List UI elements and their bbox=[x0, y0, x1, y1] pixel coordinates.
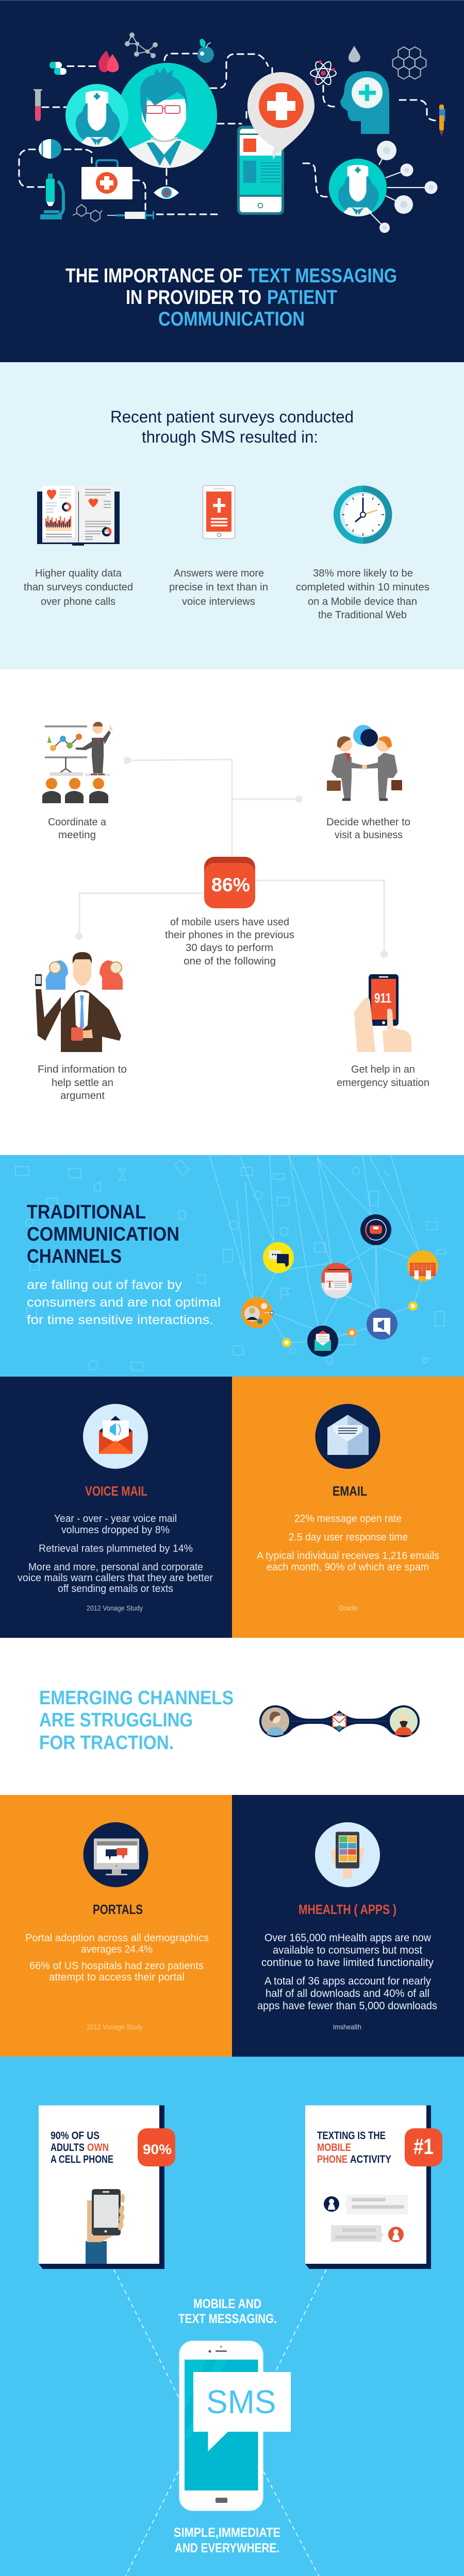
text: portal stats: averages 24.4% bbox=[81, 1944, 153, 1955]
caption: visit: visit a business bbox=[335, 829, 403, 841]
text: mobile and text messaging: TEXT MESSAGING. bbox=[178, 2312, 277, 2326]
icon: phone with cross bbox=[203, 485, 235, 539]
icon: head with cross bbox=[340, 71, 389, 134]
caption: visit bbox=[326, 817, 410, 841]
text: voice mail stats: voice mails warn callers that they are better bbox=[18, 1572, 213, 1584]
panel: mhealth bbox=[232, 1795, 464, 2057]
icon: monitor bbox=[84, 1822, 148, 1887]
callout: SMS bubble bbox=[193, 2372, 291, 2451]
icon: doctor bbox=[117, 63, 217, 170]
icon: keyboard node bbox=[407, 1250, 438, 1281]
icon: email envelope bbox=[316, 1404, 380, 1469]
text: own a cell phone: A CELL PHONE bbox=[51, 2154, 113, 2165]
dashed lines to cards bbox=[114, 2269, 326, 2576]
heading: emerging: FOR TRACTION. bbox=[39, 1732, 174, 1754]
icon: people node bbox=[241, 1297, 273, 1328]
caption: argument: help settle an bbox=[52, 1077, 113, 1089]
heading: survey: through SMS resulted in: bbox=[142, 428, 318, 446]
heading: survey: Recent patient surveys conducted bbox=[110, 408, 354, 426]
title: COMMUNICATION bbox=[158, 308, 305, 330]
caption: emergency bbox=[337, 1064, 429, 1089]
text: falling out of favor: are falling out of favor by bbox=[27, 1278, 183, 1292]
icon: chat bubbles bbox=[324, 2195, 408, 2242]
text: texting activity: ACTIVITY bbox=[350, 2154, 391, 2165]
title: TEXT MESSAGING bbox=[248, 265, 397, 287]
caption: emergency: emergency situation bbox=[337, 1077, 429, 1089]
heading: traditional: COMMUNICATION bbox=[27, 1224, 179, 1245]
icon: article node: T bbox=[326, 1279, 334, 1290]
text: mobile users bbox=[165, 917, 294, 967]
text: email stats: 22% message open rate bbox=[294, 1513, 402, 1524]
heading: mhealth: MHEALTH ( APPS ) bbox=[299, 1902, 396, 1917]
heading: emerging: EMERGING CHANNELS bbox=[39, 1687, 234, 1709]
panel: survey results bbox=[0, 362, 464, 669]
icon: blood drops bbox=[98, 50, 119, 72]
text: email stats: 2.5 day user response time bbox=[289, 1532, 408, 1543]
badge: number one bbox=[405, 2128, 442, 2166]
heading: portals: PORTALS bbox=[93, 1902, 143, 1917]
text: mhealth stats: Over 165,000 mHealth apps are now bbox=[264, 1932, 432, 1944]
caption: likely: completed within 10 minutes bbox=[296, 582, 429, 593]
text: own a cell phone: ADULTS bbox=[51, 2142, 85, 2154]
icon: atom bbox=[310, 60, 336, 87]
caption: emergency: Get help in an bbox=[351, 1064, 415, 1075]
text: portal stats: 66% of US hospitals had zero patients bbox=[29, 1960, 204, 1972]
source: oracle: Oracle bbox=[339, 1604, 357, 1612]
heading: emerging bbox=[39, 1687, 234, 1754]
text: mobile users: 30 days to perform bbox=[186, 942, 273, 954]
icon: molecule bbox=[125, 33, 157, 58]
icon: man with phone and mug bbox=[35, 952, 123, 1052]
panel: portals bbox=[0, 1795, 232, 2057]
icon: hex molecule low bbox=[73, 205, 102, 222]
caption: argument: argument bbox=[60, 1090, 105, 1101]
icon: pen bbox=[439, 105, 445, 136]
text: mobile and text messaging: MOBILE AND bbox=[193, 2297, 261, 2311]
icon: SMS phone bbox=[179, 2341, 291, 2511]
title bbox=[65, 265, 397, 330]
decorative faint icons bbox=[15, 1160, 446, 1370]
caption: likely bbox=[296, 568, 429, 621]
text: portal stats: attempt to access their portal bbox=[49, 1972, 185, 1983]
icon: hand holding phone bbox=[86, 2189, 125, 2264]
source: imshealth: imshealth bbox=[333, 2023, 361, 2031]
caption: likely: 38% more likely to be bbox=[313, 568, 413, 579]
text: mobile and text messaging bbox=[178, 2297, 277, 2326]
text: voice mail stats bbox=[18, 1513, 213, 1595]
text: email stats: each month, 90% of which are spam bbox=[267, 1562, 429, 1573]
caption: argument: Find information to bbox=[38, 1064, 127, 1075]
heading: email: EMAIL bbox=[333, 1483, 367, 1499]
small network dots bbox=[282, 1301, 418, 1347]
title: THE IMPORTANCE OF bbox=[65, 265, 243, 287]
caption: meeting: meeting bbox=[58, 829, 96, 841]
icon: SMS between people: SMS bbox=[336, 1714, 343, 1717]
text: texting activity: TEXTING IS THE bbox=[317, 2130, 386, 2142]
icon: presenter bbox=[42, 722, 113, 803]
icon: report book bbox=[37, 485, 120, 546]
panel: mobile and text messaging bbox=[0, 2057, 464, 2576]
connector lines bbox=[75, 757, 388, 958]
panel: traditional channels bbox=[0, 1155, 464, 1377]
caption: quality: Higher quality data bbox=[35, 568, 122, 579]
icon: hand with phone apps bbox=[315, 1822, 380, 1887]
icon: voice mail envelope bbox=[83, 1404, 148, 1469]
badge: number one: #1 bbox=[413, 2134, 434, 2159]
caption: meeting bbox=[48, 817, 107, 841]
text: own a cell phone: OWN bbox=[87, 2142, 109, 2154]
panel: email bbox=[232, 1377, 464, 1638]
icon: medical kit bbox=[81, 160, 132, 199]
text: simple immediate: SIMPLE,IMMEDIATE bbox=[174, 2526, 280, 2540]
icon: microscope bbox=[40, 174, 63, 219]
text: portal stats bbox=[25, 1933, 209, 1983]
panel: voice mail bbox=[0, 1377, 232, 1638]
text: mhealth stats: half of all downloads and 40% of all bbox=[266, 1988, 429, 1999]
icon: chat node bbox=[263, 1242, 294, 1273]
icon: handshake bbox=[327, 725, 402, 800]
icon: test tube bbox=[34, 89, 42, 121]
icon: nurse left bbox=[65, 84, 128, 147]
badge: 90 percent bbox=[138, 2128, 175, 2166]
text: voice mail stats: More and more, personal and corporate bbox=[28, 1562, 203, 1573]
icon: speaker node bbox=[367, 1309, 397, 1340]
caption: meeting: Coordinate a bbox=[48, 817, 107, 828]
text: voice mail stats: volumes dropped by 8% bbox=[61, 1524, 170, 1536]
caption: quality: than surveys conducted bbox=[24, 582, 133, 593]
text: falling out of favor: consumers and are not optimal bbox=[27, 1295, 221, 1310]
text: mhealth stats: A total of 36 apps account for nearly bbox=[264, 1975, 431, 1987]
text: mhealth stats: available to consumers but most bbox=[273, 1944, 422, 1956]
icon: phone node bbox=[360, 1214, 391, 1245]
panel: header bbox=[0, 0, 464, 362]
title: IN PROVIDER TO bbox=[126, 286, 261, 309]
icon: syringe bbox=[107, 211, 154, 219]
text: email stats bbox=[257, 1513, 439, 1573]
text: mobile users: one of the following bbox=[184, 956, 276, 967]
panel: mobile users bbox=[0, 669, 464, 1155]
icon: location pin with cross bbox=[247, 72, 314, 160]
panel: emerging channels bbox=[0, 1638, 464, 1795]
icon: grey drop bbox=[349, 46, 360, 62]
text: voice mail stats: Year - over - year voice mail bbox=[54, 1513, 177, 1524]
card: texting activity bbox=[305, 2105, 442, 2269]
icon: SMS between people bbox=[259, 1705, 420, 1737]
caption: precise: Answers were more bbox=[174, 568, 264, 579]
card: own a cell phone bbox=[39, 2105, 175, 2269]
heading: voice mail: VOICE MAIL bbox=[85, 1483, 147, 1499]
text: mobile users: of mobile users have used bbox=[170, 917, 289, 928]
icon: eye bbox=[154, 187, 179, 199]
heading: traditional: TRADITIONAL bbox=[27, 1201, 146, 1223]
heading: survey bbox=[110, 408, 354, 446]
icon: phone with app screen bbox=[237, 126, 284, 215]
caption: likely: on a Mobile device than bbox=[308, 596, 417, 607]
heading: traditional bbox=[27, 1201, 179, 1267]
text: mhealth stats: apps have fewer than 5,000 downloads bbox=[257, 2000, 437, 2012]
caption: precise: voice interviews bbox=[182, 596, 255, 607]
icon: hexagon lattice bbox=[393, 47, 426, 79]
illustration: dashed connectors bbox=[19, 54, 437, 214]
heading: traditional: CHANNELS bbox=[27, 1246, 122, 1267]
text: portal stats: Portal adoption across all demographics bbox=[25, 1933, 209, 1944]
text: texting activity bbox=[317, 2130, 391, 2165]
text: falling out of favor: for time sensitive interactions. bbox=[27, 1313, 213, 1327]
icon: apple bbox=[197, 39, 214, 63]
icon: envelope node bbox=[307, 1326, 338, 1357]
text: email stats: A typical individual receives 1,216 emails bbox=[257, 1550, 439, 1562]
icon: pills bbox=[49, 62, 67, 75]
text: falling out of favor bbox=[27, 1278, 221, 1327]
caption: quality: over phone calls bbox=[41, 596, 115, 607]
callout: SMS bubble: SMS bbox=[206, 2383, 276, 2420]
text: texting activity: MOBILE bbox=[317, 2142, 351, 2154]
text: simple immediate bbox=[174, 2526, 280, 2555]
badge: 90 percent: 90% bbox=[143, 2142, 172, 2157]
caption: precise bbox=[169, 568, 268, 607]
network lines bbox=[209, 1155, 423, 1343]
icon: nurse right with network bbox=[329, 141, 437, 233]
text: mobile users: their phones in the previous bbox=[165, 929, 294, 941]
text: mhealth stats bbox=[257, 1932, 437, 2012]
stat: 86 percent bbox=[204, 857, 255, 908]
caption: likely: the Traditional Web bbox=[318, 609, 407, 621]
text: own a cell phone bbox=[51, 2130, 113, 2165]
icon: clock bbox=[334, 485, 392, 544]
caption: visit: Decide whether to bbox=[326, 817, 410, 828]
caption: argument bbox=[38, 1064, 127, 1101]
stat: 86 percent: 86% bbox=[211, 874, 250, 895]
text: voice mail stats: Retrieval rates plummeted by 14% bbox=[39, 1543, 193, 1554]
caption: quality bbox=[24, 568, 133, 607]
heading: emerging: ARE STRUGGLING bbox=[39, 1709, 193, 1731]
source: vonage: 2012 Vonage Study bbox=[87, 1604, 143, 1612]
text: mhealth stats: continue to have limited functionality bbox=[261, 1957, 434, 1969]
icon: hand with 911 phone: 911 bbox=[374, 990, 391, 1006]
source: portals: 2012 Vonage Study bbox=[87, 2023, 143, 2031]
text: simple immediate: AND EVERYWHERE. bbox=[175, 2541, 279, 2555]
text: own a cell phone: 90% OF US bbox=[51, 2130, 100, 2142]
icon: capsule bbox=[39, 139, 61, 159]
title: PATIENT bbox=[267, 286, 337, 309]
text: voice mail stats: off sending emails or texts bbox=[58, 1583, 173, 1595]
icon: hand with 911 phone bbox=[354, 974, 411, 1052]
icon: article node bbox=[321, 1263, 352, 1298]
caption: precise: precise in text than in bbox=[169, 582, 268, 593]
text: texting activity: PHONE bbox=[317, 2154, 347, 2165]
